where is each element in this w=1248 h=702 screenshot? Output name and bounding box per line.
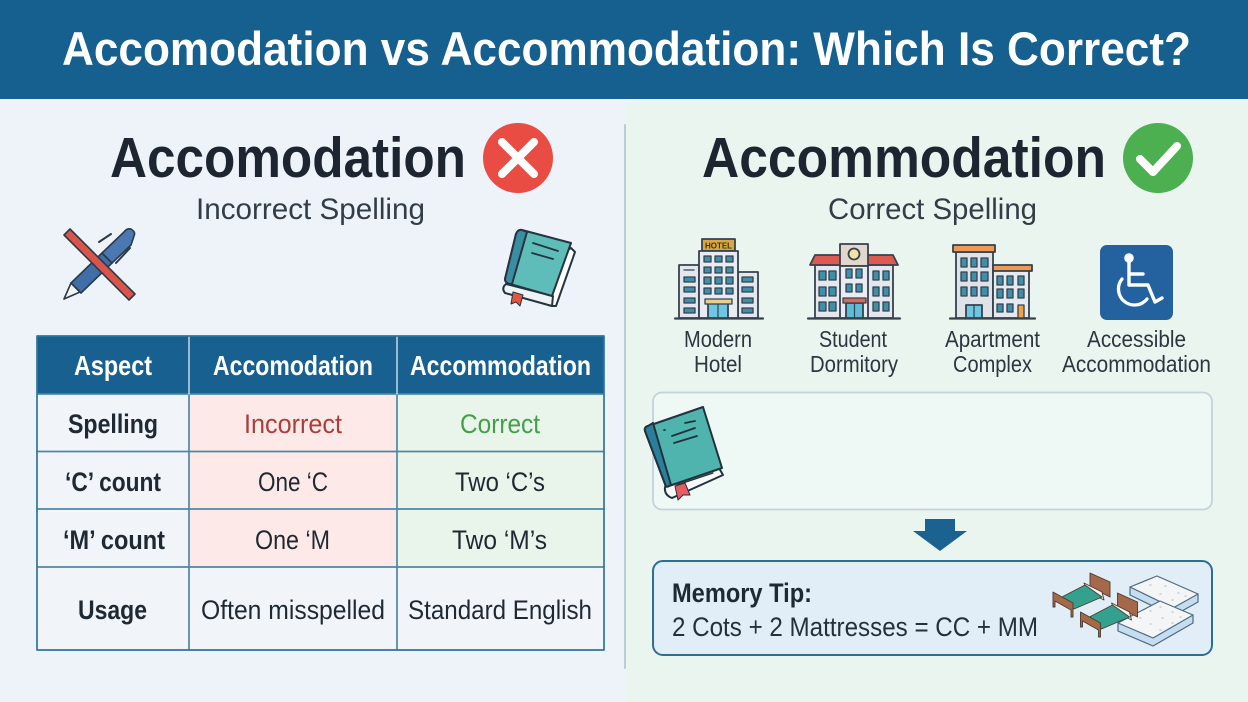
label: student dormitory: Dormitory (810, 351, 898, 377)
row: spelling: Incorrect (244, 409, 342, 439)
icon: student dormitory (808, 244, 900, 318)
row: usage: Standard English (408, 595, 592, 625)
memory tip text: 2 Cots + 2 Mattresses = CC + MM (672, 612, 1038, 642)
heading: Accommodation: Accommodation (702, 126, 1106, 190)
row: M count (63, 525, 547, 555)
label: modern hotel: Hotel (694, 351, 742, 377)
subheading: correct spelling: Correct Spelling (828, 193, 1037, 226)
row: C count: ‘C’ count (65, 467, 161, 497)
label: accessible accommodation (1062, 326, 1211, 377)
label: apartment complex: Complex (953, 351, 1032, 377)
memory tip heading: Memory Tip: (672, 578, 812, 608)
row: C count: Two ‘C’s (455, 467, 545, 497)
row: C count (65, 467, 545, 497)
right panel: correct spelling (645, 123, 1212, 655)
table header row (74, 350, 591, 381)
icon: crossed out pen (64, 229, 135, 300)
table header row: Accomodation (213, 350, 373, 381)
title banner (0, 0, 1248, 99)
mattress front (1118, 601, 1193, 646)
cot one (1053, 573, 1110, 617)
icon: closed book (503, 230, 575, 306)
row: usage: Often misspelled (201, 595, 385, 625)
title banner: Accomodation vs Accommodation: Which Is Correct? (62, 22, 1191, 75)
mattress back (1130, 576, 1198, 616)
memory tip box (653, 561, 1212, 655)
empty note box (653, 392, 1212, 510)
icon: accessible wheelchair sign (1100, 245, 1173, 320)
row: M count: ‘M’ count (63, 525, 165, 555)
left panel: incorrect spelling (37, 123, 604, 650)
icon: green check (1123, 123, 1193, 193)
row: C count: One ‘C (258, 467, 328, 497)
table header row: Accommodation (410, 350, 591, 381)
icon: modern hotel (675, 239, 763, 318)
icon: red cross (483, 123, 553, 193)
label: accessible accommodation: Accessible (1087, 326, 1186, 352)
label: modern hotel: Modern (684, 326, 752, 352)
label: student dormitory: Student (819, 326, 888, 352)
row: M count: Two ‘M’s (452, 525, 547, 555)
icon: tilted book (645, 407, 723, 500)
icon: apartment complex (950, 245, 1035, 318)
icon: modern hotel: HOTEL (705, 242, 732, 250)
row: M count: One ‘M (255, 525, 330, 555)
label: accessible accommodation: Accommodation (1062, 351, 1211, 377)
row: spelling (68, 409, 540, 439)
row: spelling: Spelling (68, 409, 158, 439)
label: student dormitory (810, 326, 898, 377)
row: usage (78, 595, 592, 625)
comparison table (37, 336, 604, 650)
table header row: Aspect (74, 350, 152, 381)
label: modern hotel (684, 326, 752, 377)
row: spelling: Correct (460, 409, 540, 439)
heading: Accomodation: Accomodation (110, 126, 466, 190)
row: usage: Usage (78, 595, 147, 625)
label: apartment complex (945, 326, 1041, 377)
subheading: incorrect spelling: Incorrect Spelling (196, 193, 425, 226)
cot two (1080, 593, 1138, 637)
arrow (913, 519, 967, 551)
label: apartment complex: Apartment (945, 326, 1041, 352)
icon: two cots and two mattresses (1053, 573, 1198, 646)
